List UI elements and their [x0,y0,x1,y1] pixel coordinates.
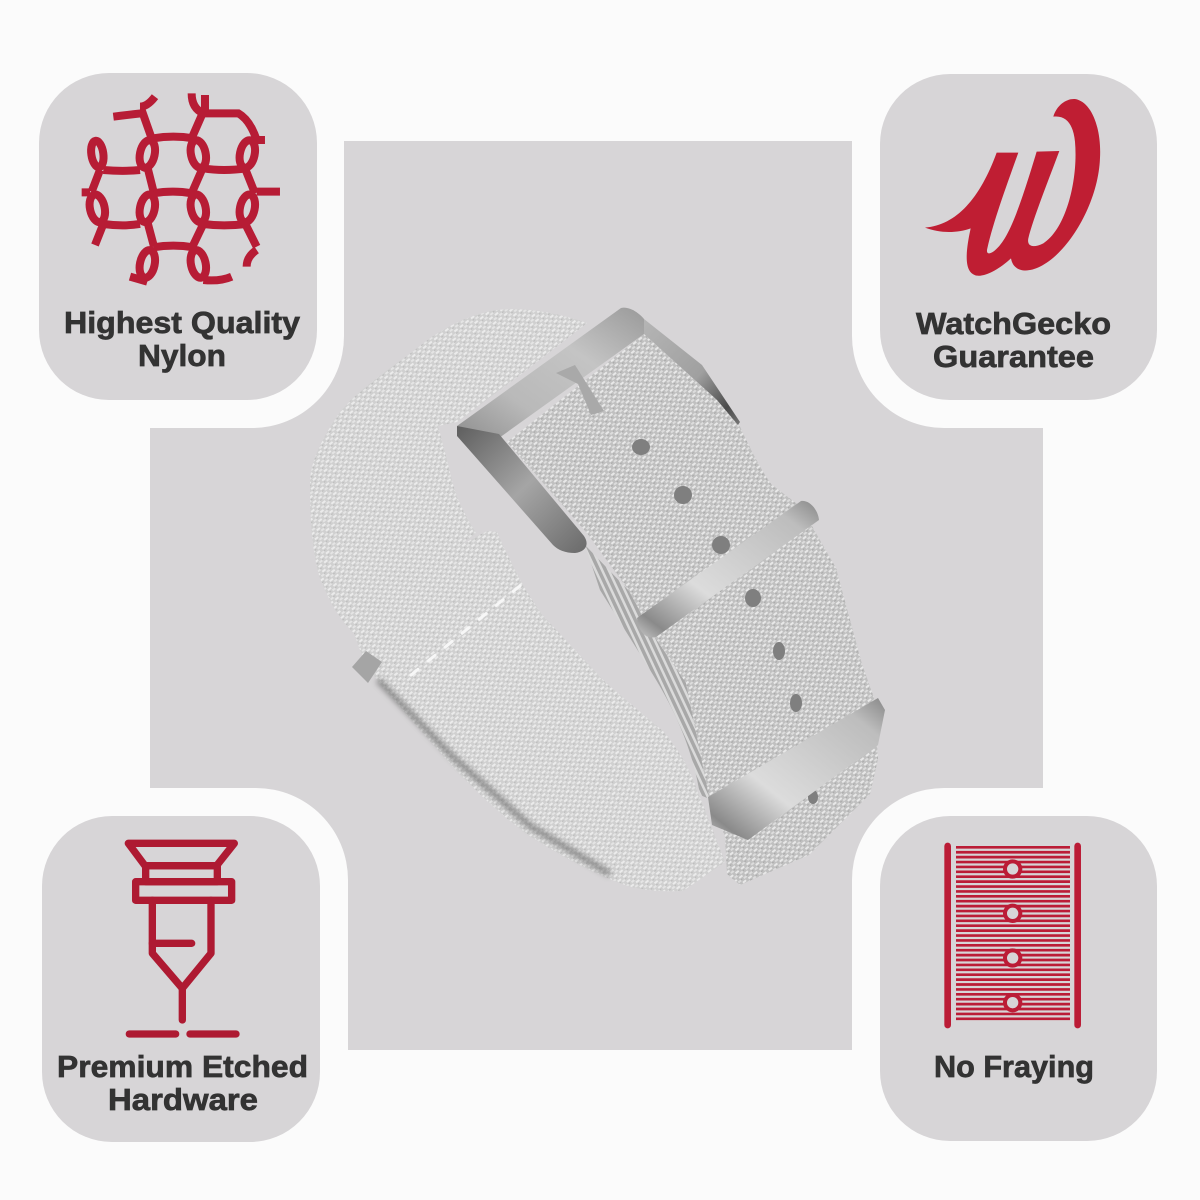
small end keeper [352,651,382,683]
icon: woven nylon mesh [82,93,280,282]
strap holes [632,439,818,804]
buckle left arm [457,426,587,553]
stitching [411,581,526,675]
icon: WatchGecko W logo [925,99,1100,276]
label line 2: Guarantee [933,339,1094,374]
card: Premium Etched Hardware [42,816,320,1142]
icon: laser etching head [128,843,236,1034]
strap lower folded section [354,531,725,891]
card: WatchGecko Guarantee [880,74,1157,400]
card: Highest Quality Nylon [39,73,317,400]
label: No Fraying [934,1049,1094,1084]
upper keeper [637,501,819,638]
icon: sealed strap edge [948,846,1078,1025]
label: WatchGecko [916,306,1111,341]
label line 2: Nylon [138,338,226,373]
strap back loop [310,309,587,633]
buckle top bar [457,308,644,438]
central grey background panel [150,141,1043,1050]
label: Highest Quality [64,305,301,340]
label line 2: Hardware [108,1082,258,1117]
buckle tang [556,365,604,415]
strap front band [507,334,878,885]
buckle right arm [644,319,740,425]
lower keeper [708,698,885,840]
strap under layer [585,545,712,800]
card: No Fraying [880,816,1157,1141]
label: Premium Etched [57,1049,308,1084]
strap lower edge shadow [378,680,610,874]
product photo: white nylon strap [310,308,885,891]
